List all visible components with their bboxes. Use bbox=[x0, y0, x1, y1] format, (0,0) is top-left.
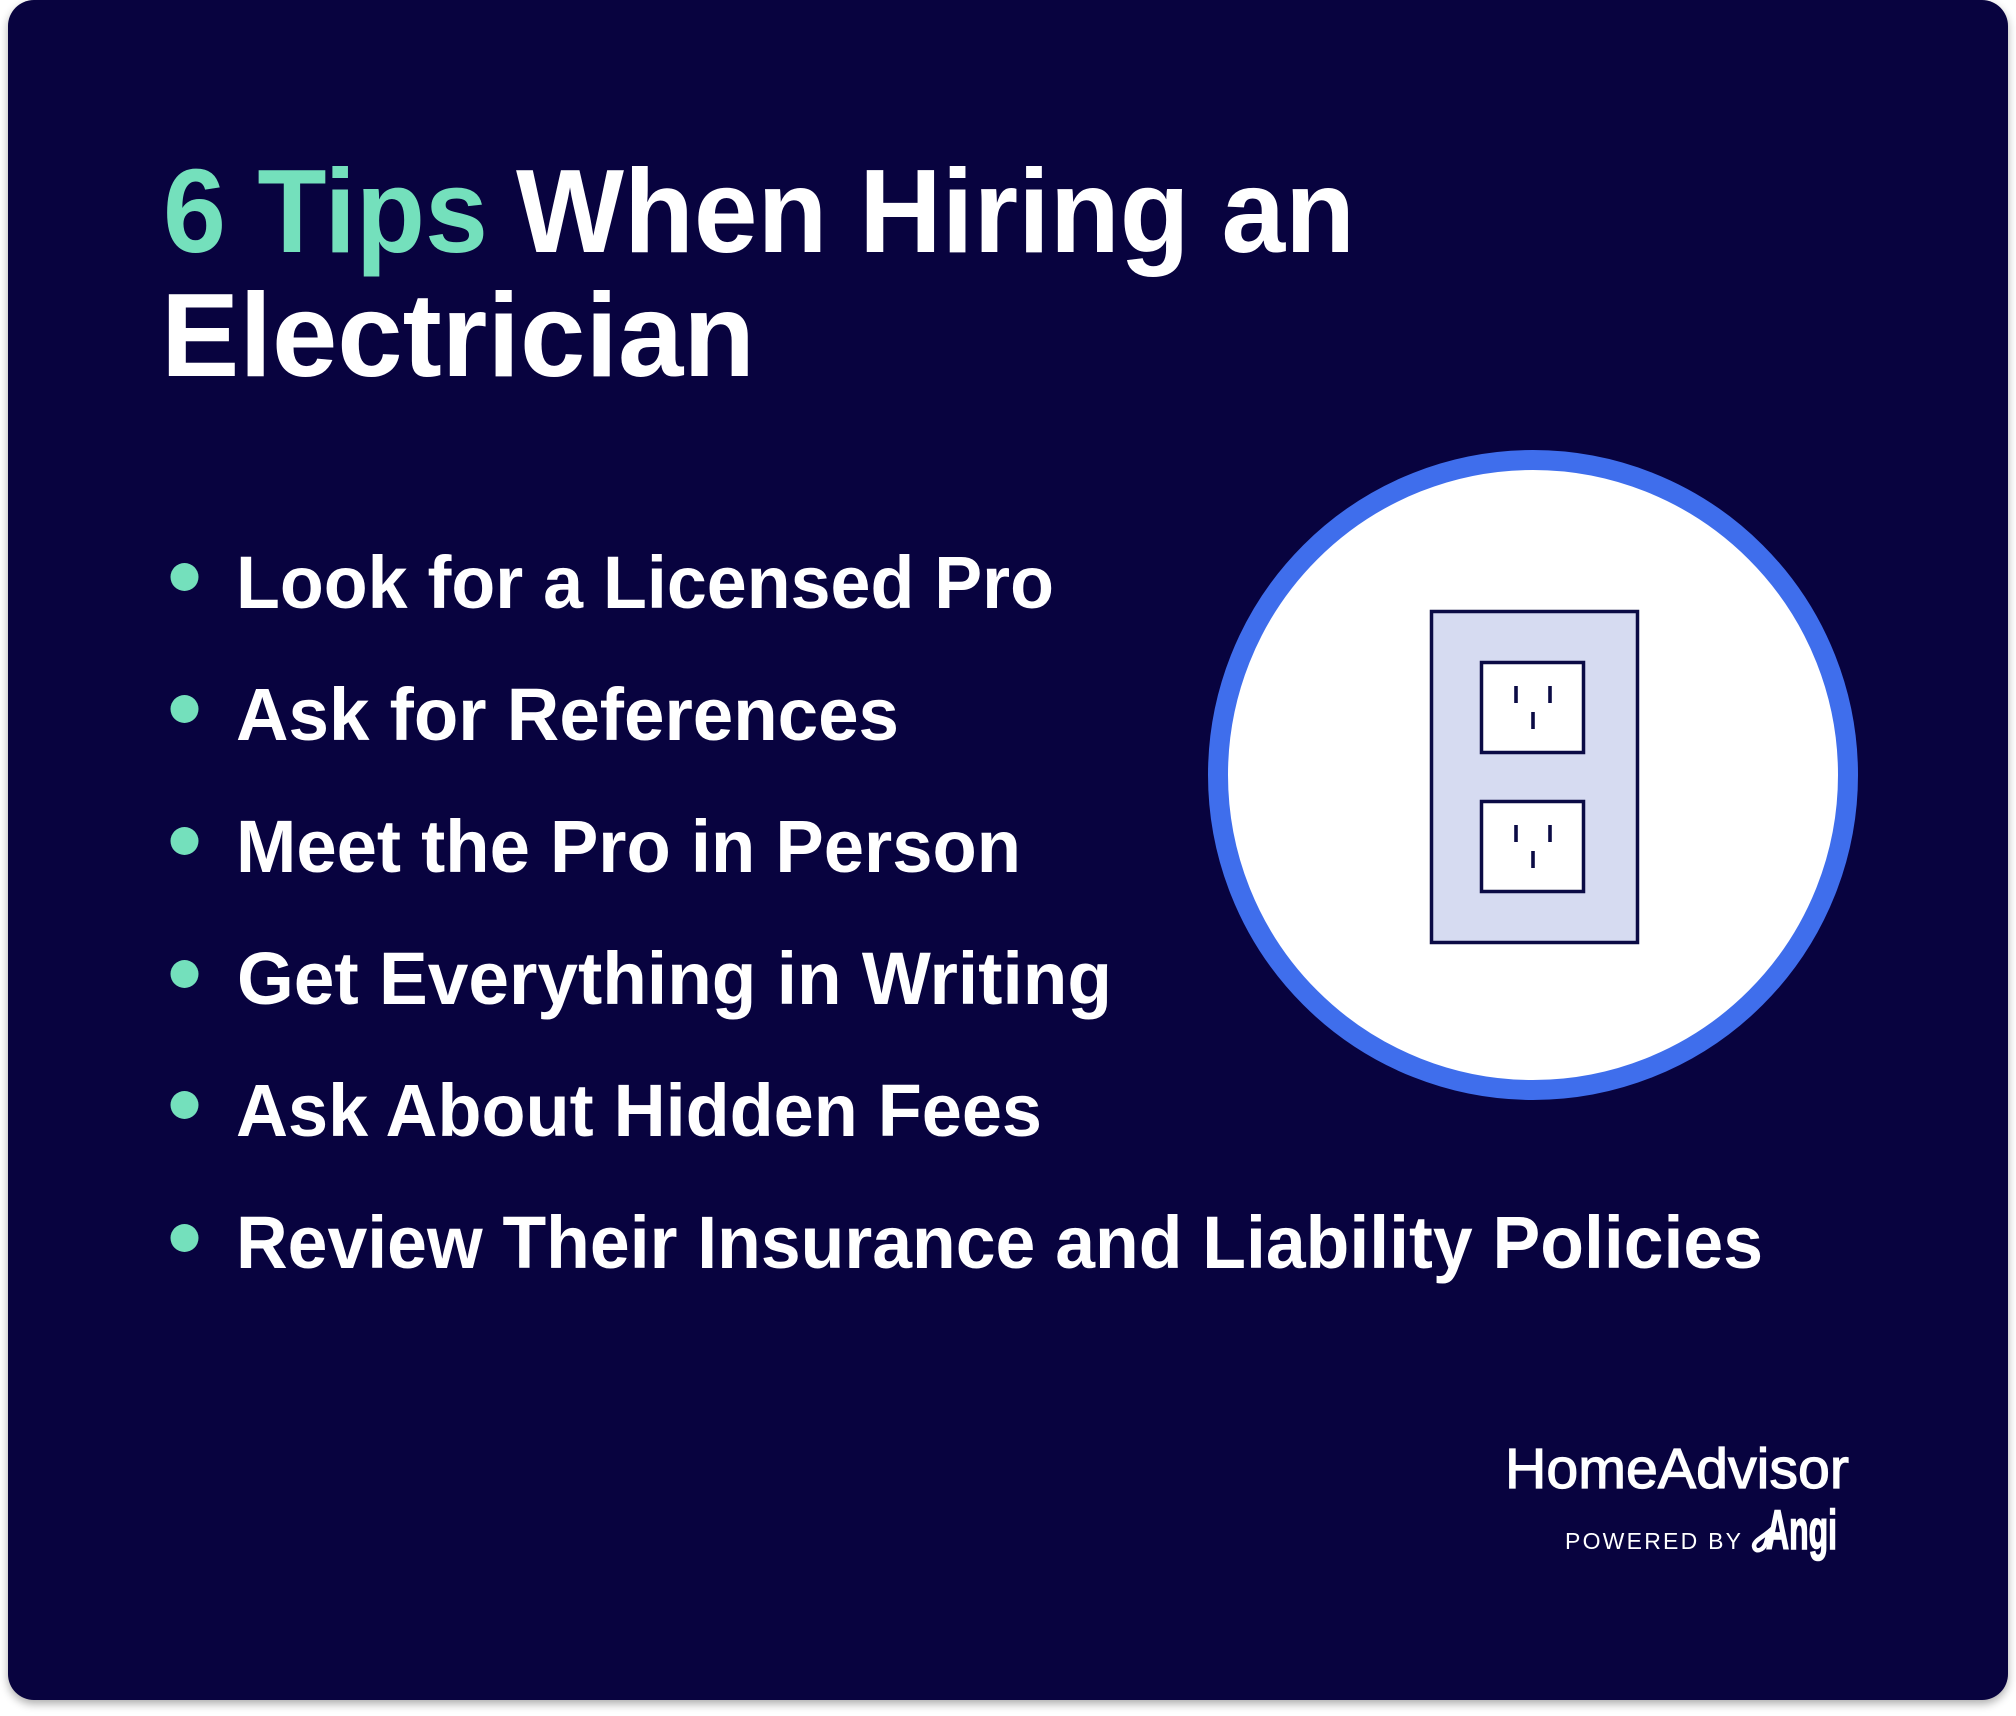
title bbox=[161, 145, 1355, 402]
title: When Hiring an bbox=[516, 145, 1355, 278]
logo: HomeAdvisor powered by Angi bbox=[1505, 1437, 1849, 1561]
tip 1: Look for a Licensed Pro bbox=[236, 541, 1054, 624]
logo: HomeAdvisor powered by Angi: Angi bbox=[1766, 1498, 1837, 1561]
title: 6 Tips bbox=[163, 145, 488, 278]
tips bullet list bbox=[170, 541, 1763, 1284]
logo: HomeAdvisor powered by Angi: HomeAdvisor bbox=[1505, 1437, 1849, 1501]
tip 3: Meet the Pro in Person bbox=[236, 805, 1021, 888]
tip 4: Get Everything in Writing bbox=[237, 937, 1112, 1020]
tip 2: Ask for References bbox=[236, 673, 899, 756]
lower socket bbox=[1482, 802, 1584, 892]
tip 6: Review Their Insurance and Liability Policies bbox=[236, 1201, 1763, 1284]
logo: HomeAdvisor powered by Angi: POWERED BY bbox=[1565, 1528, 1741, 1554]
tip 5: Ask About Hidden Fees bbox=[236, 1069, 1042, 1152]
upper socket bbox=[1482, 662, 1584, 752]
title: Electrician bbox=[161, 269, 755, 402]
icon: electrical outlet in circle bbox=[1218, 460, 1848, 1090]
outlet wall plate bbox=[1432, 612, 1638, 942]
